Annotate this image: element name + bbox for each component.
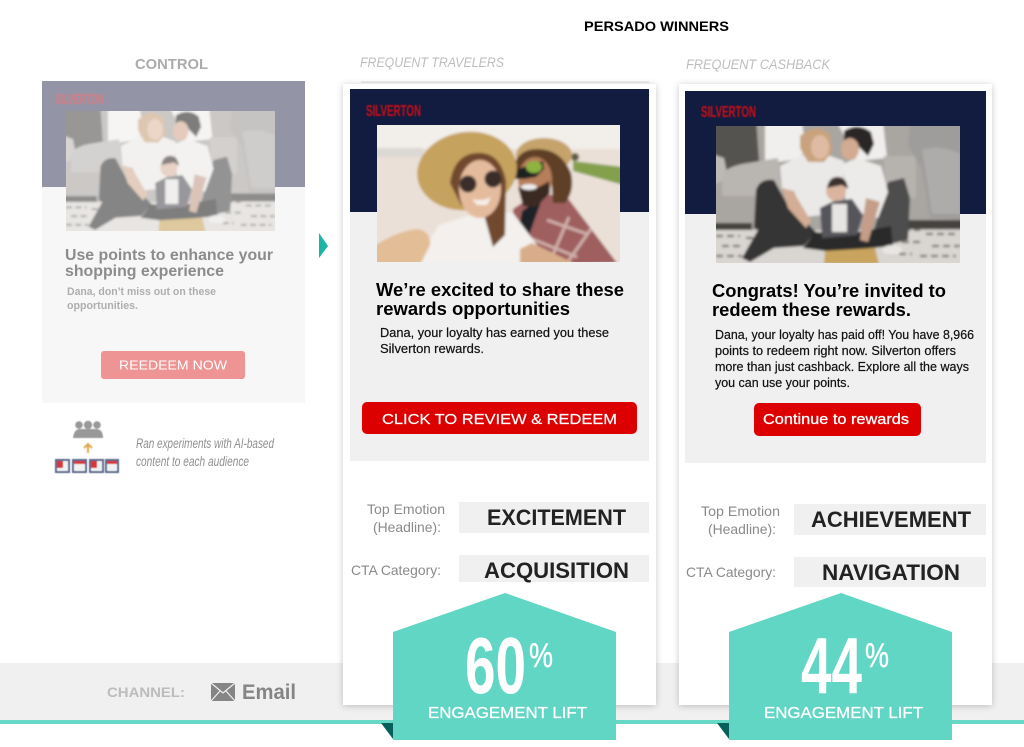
body text: Dana, your loyalty has earned you these: [380, 326, 609, 340]
cta label: CTA Category:: [351, 562, 441, 578]
control photo: [66, 111, 275, 231]
cta value: [794, 557, 986, 587]
photo: couple on beach: [377, 125, 620, 262]
control body text: Dana, don’t miss out on these: [67, 286, 216, 298]
badge: 44% engagement lift: %: [865, 637, 889, 675]
icon: envelope: [211, 683, 235, 701]
badge: 44% engagement lift: ENGAGEMENT LIFT: [764, 705, 924, 722]
emotion label: Top Emotion: [367, 501, 445, 517]
control heading: CONTROL: [135, 57, 208, 73]
control body text: opportunities.: [67, 300, 138, 312]
headline: redeem these rewards.: [712, 299, 911, 320]
headline: We’re excited to share these: [376, 279, 624, 300]
cta value: NAVIGATION: [822, 560, 960, 585]
button: [362, 402, 637, 434]
body text: Dana, your loyalty has paid off! You have 8,966: [715, 328, 974, 342]
control headline: Use points to enhance your: [65, 247, 273, 264]
logo: SILVERTON: [701, 104, 756, 121]
cta value: ACQUISITION: [484, 558, 629, 583]
body text: Silverton rewards.: [380, 342, 484, 356]
control logo: SILVERTON: [55, 91, 104, 108]
channel label: CHANNEL:: [107, 684, 185, 700]
channel band: [0, 663, 1024, 724]
panel: frequent travelers: [343, 84, 656, 705]
title: PERSADO WINNERS: [584, 18, 729, 34]
cta value: [459, 555, 649, 583]
emotion value: EXCITEMENT: [487, 505, 627, 530]
panel: frequent cashback: [679, 84, 992, 705]
control headline: [65, 247, 273, 280]
photo: family on rug: [716, 126, 960, 263]
badge: 60% engagement lift: %: [529, 637, 553, 675]
body text: points to redeem right now. Silverton offers: [715, 344, 956, 358]
arrow: [319, 233, 328, 258]
badge: 44% engagement lift: [717, 593, 952, 740]
body text: more than just cashback. Explore all the ways: [715, 360, 969, 374]
headline: [712, 280, 946, 320]
audience label: frequent travelers: FREQUENT TRAVELERS: [360, 54, 505, 70]
button: CLICK TO REVIEW & REDEEM: [382, 411, 617, 428]
emotion value: [459, 502, 649, 533]
button: [754, 403, 921, 436]
headline: Congrats! You’re invited to: [712, 280, 946, 301]
experiments note: content to each audience: [136, 454, 249, 469]
cta label: CTA Category:: [686, 564, 776, 580]
emotion label: (Headline):: [708, 521, 776, 537]
logo: SILVERTON: [366, 103, 421, 120]
emotion label: [367, 501, 445, 535]
emotion label: [701, 503, 780, 537]
badge: 60% engagement lift: 60: [465, 621, 526, 710]
audience label: frequent cashback: FREQUENT CASHBACK: [686, 56, 831, 72]
emotion label: (Headline):: [373, 519, 441, 535]
panel: control: [42, 57, 305, 403]
body text: [715, 328, 974, 390]
badge: 60% engagement lift: [381, 593, 616, 740]
badge: 44% engagement lift: 44: [801, 621, 862, 710]
emotion value: ACHIEVEMENT: [811, 507, 972, 532]
headline: rewards opportunities: [376, 298, 570, 319]
badge: 60% engagement lift: ENGAGEMENT LIFT: [428, 705, 588, 722]
body text: [380, 326, 609, 356]
experiments note: Ran experiments with AI-based: [136, 436, 274, 451]
control headline: shopping experience: [65, 263, 224, 280]
emotion value: [794, 504, 986, 535]
headline: [376, 279, 624, 319]
control button: [101, 351, 245, 379]
icon: audience experiments: [55, 421, 119, 473]
body text: you can use your points.: [715, 376, 850, 390]
button: Continue to rewards: [763, 411, 909, 428]
emotion label: Top Emotion: [701, 503, 780, 519]
control button: REEDEEM NOW: [119, 358, 228, 372]
experiments note: [136, 436, 274, 469]
control body text: [67, 286, 216, 312]
channel value: Email: [242, 681, 296, 704]
